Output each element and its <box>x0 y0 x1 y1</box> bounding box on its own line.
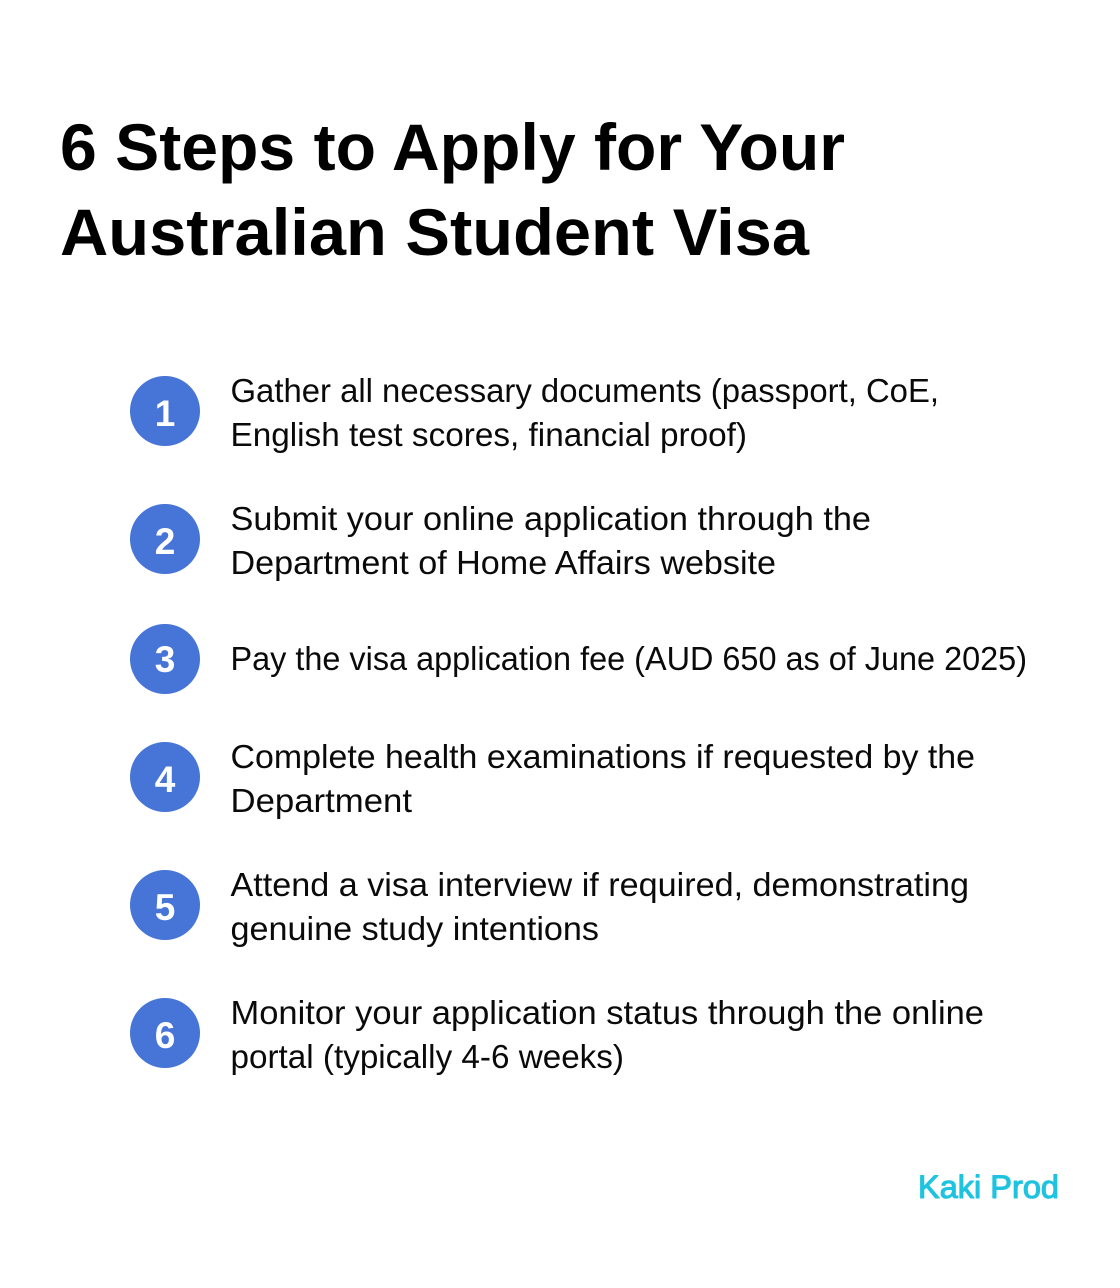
step 6 text: portal (typically 4-6 weeks) <box>230 1039 624 1076</box>
step 4 text: Department <box>230 783 413 820</box>
step 4 <box>130 739 975 820</box>
step 1 text: English test scores, financial proof) <box>230 417 747 454</box>
logo: Kaki Prod: Kaki Prod <box>918 1169 1059 1205</box>
badge: number 3: 3 <box>155 639 175 680</box>
step 2 <box>130 501 871 582</box>
badge: number 5 <box>130 870 200 940</box>
badge: number 6 <box>130 998 200 1068</box>
step 1 <box>130 373 939 454</box>
step 4 text: Complete health examinations if requested by the <box>230 739 975 776</box>
badge: number 4: 4 <box>155 759 176 800</box>
step 5 <box>130 867 969 948</box>
step 2 text: Submit your online application through the <box>230 501 871 538</box>
badge: number 1: 1 <box>155 393 175 434</box>
title: Australian Student Visa <box>60 195 810 269</box>
step 5 text: Attend a visa interview if required, demonstrating <box>230 867 969 904</box>
step 2 text <box>230 501 871 582</box>
badge: number 2: 2 <box>155 521 175 562</box>
step 6 <box>130 995 984 1076</box>
step 1 text: Gather all necessary documents (passport, CoE, <box>230 373 939 410</box>
step 4 text <box>230 739 975 820</box>
badge: number 2 <box>130 504 200 574</box>
step 3 text: Pay the visa application fee (AUD 650 as of June 2025) <box>230 641 1027 678</box>
step 2 text: Department of Home Affairs website <box>230 545 776 582</box>
step 1 text <box>230 373 939 454</box>
step 6 text: Monitor your application status through the online <box>230 995 984 1032</box>
title <box>60 110 845 269</box>
step 5 text <box>230 867 969 948</box>
badge: number 1 <box>130 376 200 446</box>
step 3 <box>130 624 1027 694</box>
step 6 text <box>230 995 984 1076</box>
title: 6 Steps to Apply for Your <box>60 110 845 184</box>
badge: number 3 <box>130 624 200 694</box>
badge: number 5: 5 <box>155 887 175 928</box>
step 5 text: genuine study intentions <box>230 911 599 948</box>
badge: number 6: 6 <box>155 1015 175 1056</box>
badge: number 4 <box>130 742 200 812</box>
